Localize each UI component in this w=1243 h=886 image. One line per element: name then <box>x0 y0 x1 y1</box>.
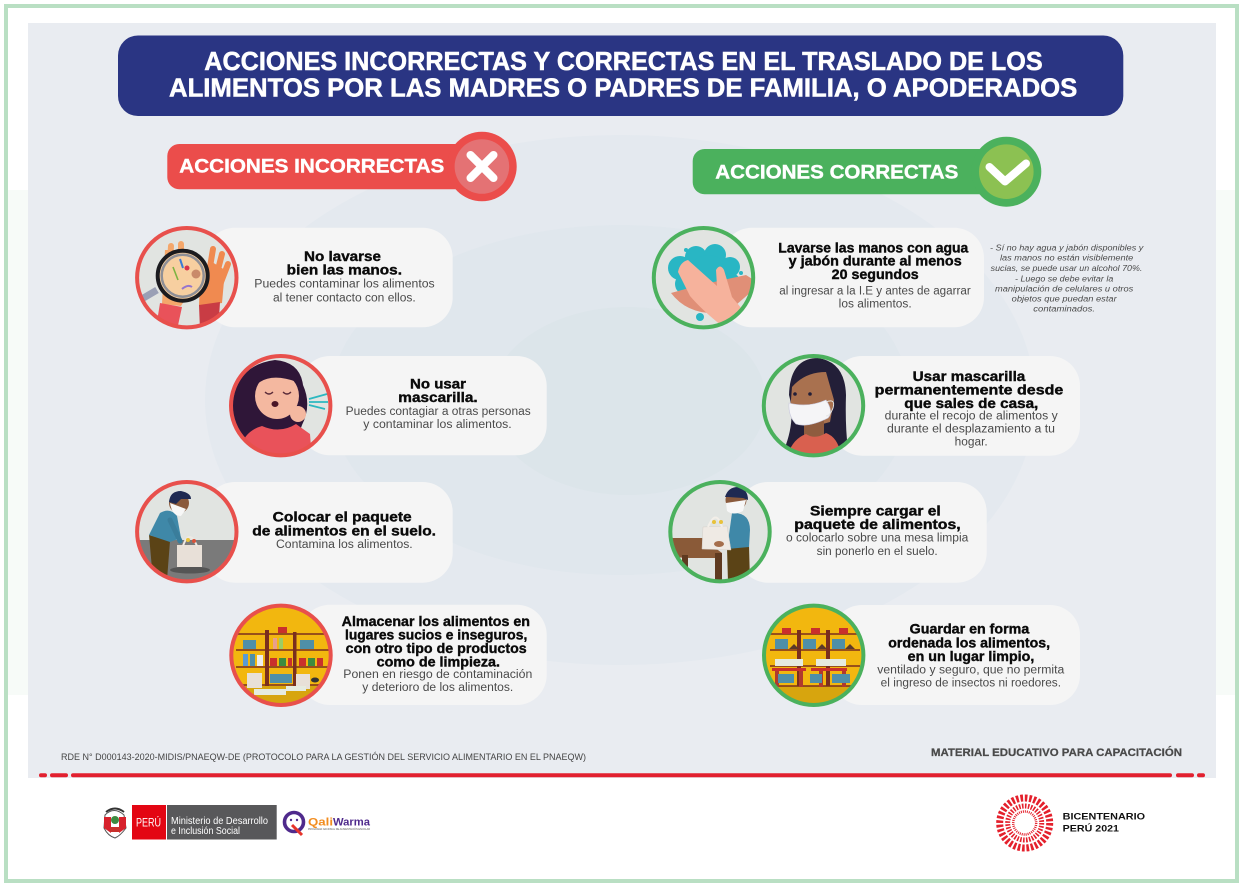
panel: paquete en el suelo <box>130 482 453 585</box>
title banner: ACCIONES INCORRECTAS Y CORRECTAS EN EL TRASLADO DE LOS <box>204 48 1043 76</box>
icon: washing hands <box>654 228 760 327</box>
panel: cargar el paquete <box>670 482 987 583</box>
icon: woman with mask <box>764 356 863 462</box>
text: no usar mascarilla: y contaminar los alimentos. <box>363 419 512 431</box>
text: no lavarse: No lavarse <box>304 248 381 264</box>
logo: escudo <box>104 808 126 838</box>
text: usar mascarilla: hogar. <box>955 437 988 449</box>
text: no usar mascarilla: No usar <box>410 375 467 391</box>
text: guardar en forma: ventilado y seguro, que no permita <box>877 664 1065 676</box>
text: almacenar: Almacenar los alimentos en <box>342 613 530 629</box>
logo: ministerio <box>132 805 277 840</box>
text: colocar el paquete: Colocar el paquete <box>273 509 412 525</box>
red footer line <box>39 773 1205 777</box>
text: guardar en forma: Guardar en forma <box>910 621 1030 637</box>
text: almacenar: como de limpieza. <box>377 654 500 670</box>
panel: lavarse las manos <box>654 228 984 327</box>
panel: almacenar en lugares sucios <box>230 605 547 706</box>
logo: bicentenario: BICENTENARIO <box>1063 811 1145 822</box>
logo: bicentenario <box>1000 798 1145 848</box>
text: almacenar: y deterioro de los alimentos. <box>362 682 513 694</box>
icon: hands under magnifier <box>137 228 236 330</box>
text: no lavarse <box>254 248 435 305</box>
text: guardar en forma: ordenada los alimentos, <box>888 634 1050 650</box>
logo: qali warma: Warma <box>333 817 371 829</box>
heading: acciones incorrectas: ACCIONES INCORRECTAS <box>179 157 444 178</box>
text: usar mascarilla: durante el recojo de alimentos y <box>885 410 1058 422</box>
title banner: ALIMENTOS POR LAS MADRES O PADRES DE FAMILIA, O APODERADOS <box>169 75 1077 103</box>
educational material label: MATERIAL EDUCATIVO PARA CAPACITACIÓN <box>931 746 1182 759</box>
heading: acciones incorrectas <box>167 132 517 201</box>
text: usar mascarilla: durante el desplazamiento a tu <box>887 424 1055 436</box>
text: guardar en forma: en un lugar limpio, <box>908 648 1034 664</box>
text: usar mascarilla <box>875 368 1064 449</box>
text: lavarse las manos: al ingresar a la I.E y antes de agarrar <box>779 286 971 298</box>
note: recomendaciones adicionales: objetos que puedan estar <box>1012 293 1118 303</box>
text: lavarse las manos: Lavarse las manos con agua <box>778 239 969 255</box>
logo: ministerio: PERÚ <box>136 815 161 830</box>
text: lavarse las manos: 20 segundos <box>832 266 919 282</box>
note: recomendaciones adicionales <box>990 243 1144 314</box>
note: recomendaciones adicionales: sucias, se puede usar un alcohol 70%. <box>991 263 1142 273</box>
text: siempre cargar: Siempre cargar el <box>810 502 941 518</box>
text: almacenar <box>342 613 532 694</box>
icon: cross <box>470 155 494 178</box>
text: lavarse las manos: y jabón durante al menos <box>789 252 962 268</box>
logo: bicentenario: PERÚ 2021 <box>1063 822 1120 834</box>
text: no usar mascarilla: mascarilla. <box>398 389 478 405</box>
text: siempre cargar <box>786 502 969 558</box>
text: colocar el paquete <box>252 509 436 551</box>
text: almacenar: Ponen en riesgo de contaminación <box>343 669 532 681</box>
icon: dirty shelves <box>230 606 332 706</box>
panel: no lavarse las manos <box>137 228 453 330</box>
note: recomendaciones adicionales: manipulación de celulares u otros <box>995 283 1134 293</box>
source note: RDE N° D000143-2020-MIDIS/PNAEQW-DE (PROTOCOLO PARA LA GESTIÓN DEL SERVICIO ALIMENTARIO EN EL PNAEQW) <box>61 752 586 762</box>
text: usar mascarilla: que sales de casa, <box>904 395 1038 411</box>
panel: usar mascarilla <box>764 356 1080 462</box>
panel: guardar ordenadamente <box>762 605 1080 706</box>
text: guardar en forma: el ingreso de insectos ni roedores. <box>881 678 1061 690</box>
text: siempre cargar: sin ponerlo en el suelo. <box>817 546 938 558</box>
note: recomendaciones adicionales: contaminados. <box>1033 304 1095 314</box>
text: usar mascarilla: Usar mascarilla <box>913 368 1026 384</box>
text: lavarse las manos <box>778 239 971 311</box>
text: guardar en forma <box>877 621 1065 690</box>
note: recomendaciones adicionales: - Luego se debe evitar la <box>1015 273 1114 283</box>
icon: girl coughing <box>231 356 330 460</box>
note: recomendaciones adicionales: - Sí no hay agua y jabón disponibles y <box>990 243 1144 253</box>
text: no lavarse: Puedes contaminar los alimentos <box>254 279 435 291</box>
heading: acciones correctas <box>693 137 1041 207</box>
text: no lavarse: bien las manos. <box>287 262 402 278</box>
text: usar mascarilla: permanentemente desde <box>875 382 1064 398</box>
icon: check <box>990 164 1026 182</box>
heading: acciones correctas: ACCIONES CORRECTAS <box>715 163 958 184</box>
panel: no usar mascarilla <box>231 356 547 460</box>
text: siempre cargar: o colocarlo sobre una mesa limpia <box>786 533 969 545</box>
title banner <box>118 36 1123 116</box>
text: almacenar: con otro tipo de productos <box>346 640 527 656</box>
logo: qali warma: Qali <box>308 817 333 829</box>
text: colocar el paquete: de alimentos en el suelo. <box>252 522 436 538</box>
text: no usar mascarilla <box>346 375 531 431</box>
logo: ministerio: e Inclusión Social <box>171 826 240 837</box>
logo: ministerio: Ministerio de Desarrollo <box>171 816 268 827</box>
text: no usar mascarilla: Puedes contagiar a otras personas <box>346 406 531 418</box>
text: colocar el paquete: Contamina los alimentos. <box>276 539 413 551</box>
text: almacenar: lugares sucios e inseguros, <box>345 626 527 642</box>
icon: man placing bag on floor <box>130 482 240 585</box>
text: siempre cargar: paquete de alimentos, <box>794 516 961 532</box>
icon: clean shelves <box>762 606 866 706</box>
logo: qali warma <box>284 812 371 835</box>
logo: qali warma: PROGRAMA NACIONAL DE ALIMENTACIÓN ESCOLAR <box>308 826 371 831</box>
text: no lavarse: al tener contacto con ellos. <box>273 293 416 305</box>
icon: man carrying bag <box>670 482 770 583</box>
note: recomendaciones adicionales: las manos no están visiblemente <box>1000 253 1134 263</box>
text: lavarse las manos: los alimentos. <box>839 299 912 311</box>
